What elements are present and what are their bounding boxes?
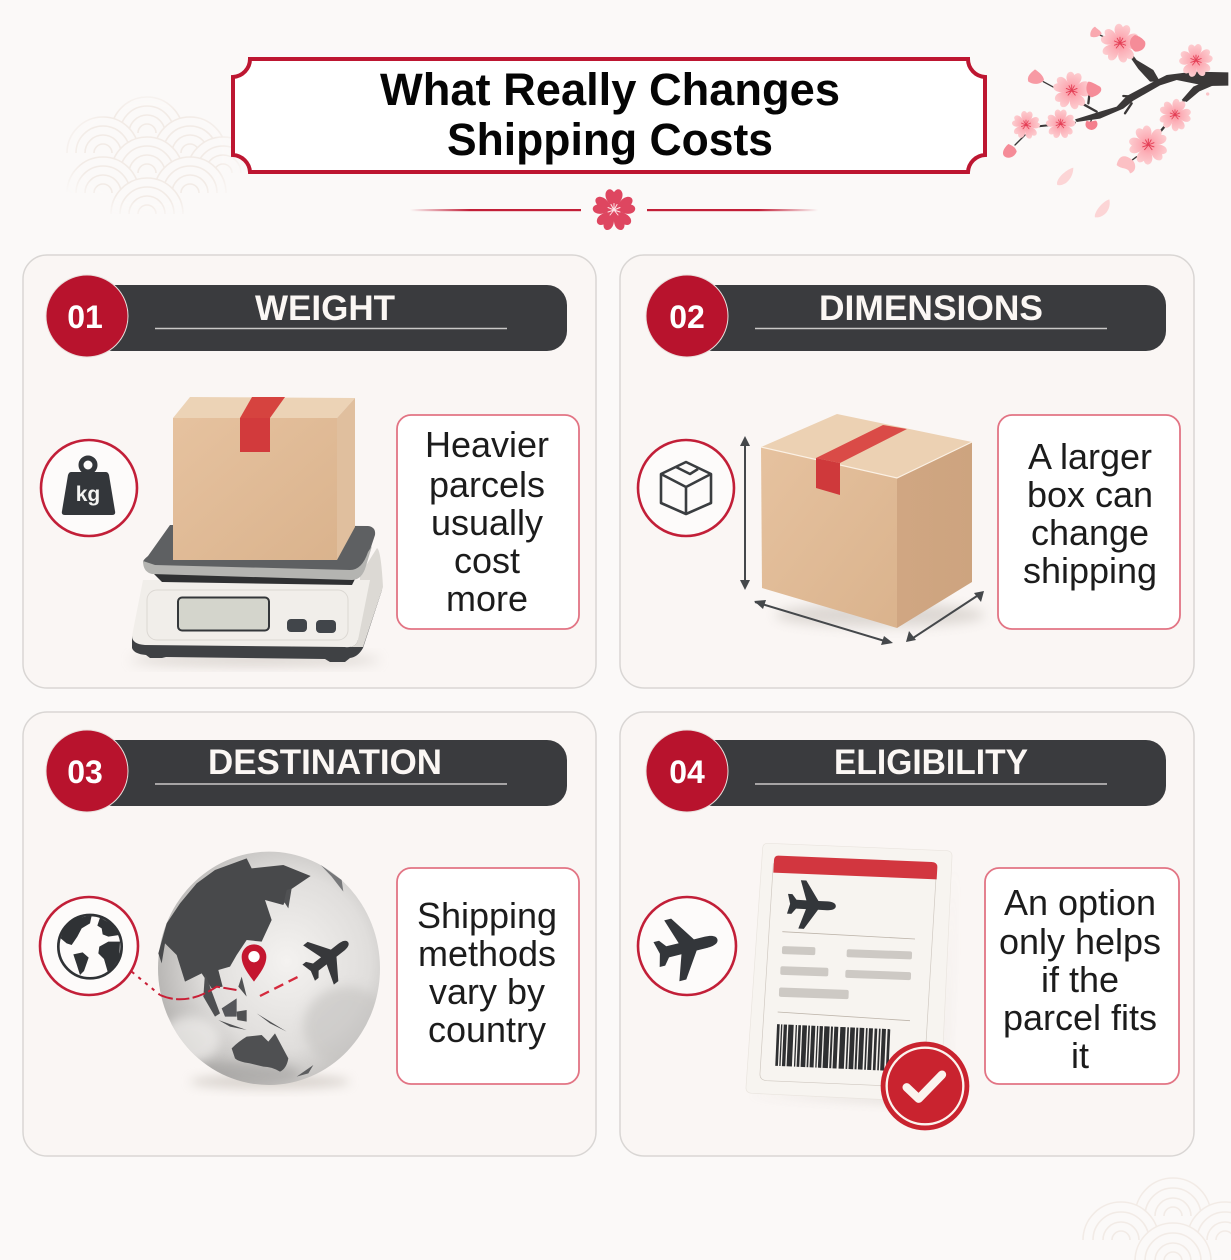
globe illustration <box>132 852 390 1089</box>
text box: A larger <box>1028 436 1152 477</box>
heading: WEIGHT <box>255 289 395 328</box>
heading: DIMENSIONS <box>819 289 1043 328</box>
header bar <box>46 275 567 357</box>
text box: An option <box>1004 882 1156 923</box>
arrows <box>745 441 980 642</box>
asia <box>158 858 311 988</box>
text box: more <box>446 578 528 619</box>
text box: parcel fits <box>1003 997 1157 1038</box>
australia <box>232 1033 288 1072</box>
scale display <box>178 598 269 630</box>
branch <box>1075 53 1228 122</box>
header bar <box>46 730 567 812</box>
text box: box can <box>1027 474 1153 515</box>
icon: kg weight: kg <box>76 483 100 506</box>
text box: usually <box>431 502 543 543</box>
text box: methods <box>418 933 556 974</box>
buds and petals <box>1003 27 1209 217</box>
text box: country <box>428 1009 546 1050</box>
parcel with dimension arrows <box>740 414 985 645</box>
icon: plane <box>638 897 736 995</box>
header bar <box>646 275 1166 357</box>
number 04: 04 <box>669 754 705 790</box>
scale buttons <box>287 619 307 632</box>
cherry blossom branch <box>1003 21 1228 217</box>
text box <box>397 415 579 629</box>
text box: it <box>1071 1035 1089 1076</box>
box <box>761 414 972 478</box>
text box <box>998 415 1180 629</box>
heading: ELIGIBILITY <box>834 743 1028 782</box>
text box: shipping <box>1023 550 1157 591</box>
scale side <box>345 548 383 647</box>
shipping label illustration <box>746 843 969 1130</box>
route <box>132 972 160 995</box>
heading: DESTINATION <box>208 743 442 782</box>
title line 2: Shipping Costs <box>447 114 773 165</box>
number 01: 01 <box>67 299 103 335</box>
header bar <box>646 730 1166 812</box>
scale body <box>132 580 370 647</box>
scale base <box>132 590 382 662</box>
barcode <box>775 1024 890 1071</box>
text box: Heavier <box>425 424 549 465</box>
check badge <box>881 1042 969 1130</box>
panel: dimensions <box>620 255 1194 688</box>
grey text bars <box>779 946 912 999</box>
divider lines <box>778 932 915 1021</box>
label inner outline <box>760 863 937 1087</box>
parcel <box>173 397 355 418</box>
text box: cost <box>454 540 520 581</box>
blossoms <box>1010 21 1215 171</box>
text box: Shipping <box>417 895 557 936</box>
icon: globe <box>40 897 138 995</box>
text box: if the <box>1041 959 1119 1000</box>
text box: change <box>1031 512 1149 553</box>
title divider with blossom <box>410 189 818 232</box>
title plaque <box>233 59 985 172</box>
text box <box>985 868 1179 1084</box>
red label header <box>773 856 937 879</box>
blossom centers <box>1021 37 1201 150</box>
icon: cube <box>638 440 734 536</box>
tape <box>816 425 907 463</box>
map pin <box>242 944 266 982</box>
text box: vary by <box>429 971 545 1012</box>
scale platter <box>152 572 355 585</box>
text box: parcels <box>429 464 545 505</box>
icon: kg weight <box>41 440 137 536</box>
title line 1: What Really Changes <box>380 64 840 115</box>
panel: eligibility <box>620 712 1194 1156</box>
number 03: 03 <box>67 754 103 790</box>
label sheet <box>746 843 952 1102</box>
plane <box>293 922 363 992</box>
wave pattern: top left <box>66 96 236 214</box>
panel: weight <box>23 255 596 688</box>
plane <box>786 880 837 930</box>
number 02: 02 <box>669 299 705 335</box>
tape <box>240 397 285 418</box>
panel: destination <box>23 712 596 1156</box>
wave pattern: bottom right <box>1083 1178 1231 1260</box>
text box: only helps <box>999 921 1161 962</box>
parcel on scale illustration <box>130 397 383 666</box>
text box <box>397 868 579 1084</box>
